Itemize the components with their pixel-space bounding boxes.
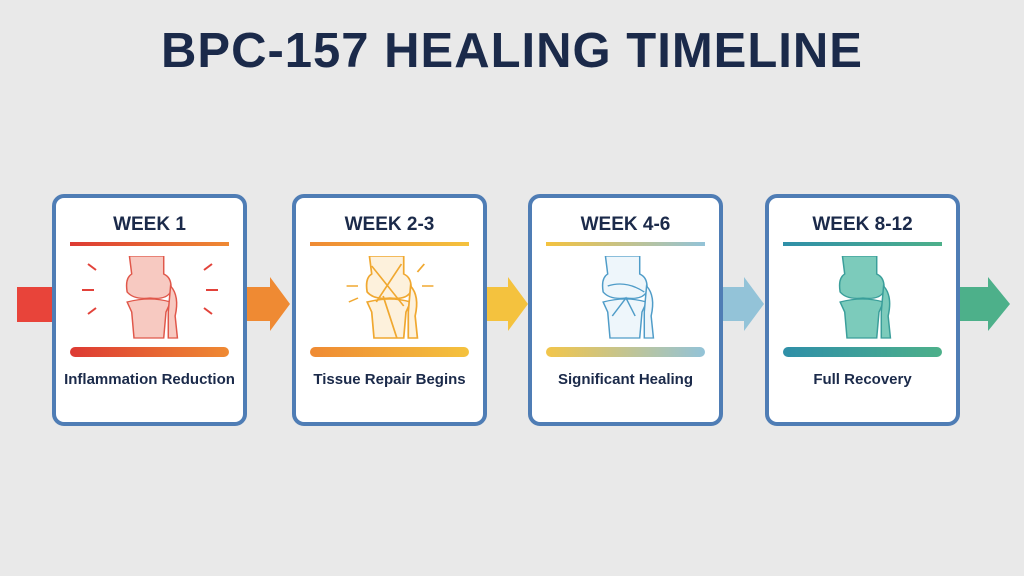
icon: inflamed knee: [126, 256, 178, 339]
title: BPC-157 HEALING TIMELINE: [161, 24, 863, 78]
arrow: 2 to 3: [487, 277, 528, 331]
heading week 4-6: WEEK 4-6: [581, 214, 670, 235]
label week 4-6: Significant Healing: [558, 371, 693, 388]
heading week 8-12: WEEK 8-12: [812, 214, 913, 235]
panel: week 2-3: [292, 194, 487, 426]
arrow: 1 to 2: [247, 277, 290, 331]
icon: repairing knee: [346, 256, 434, 339]
icon: recovered knee: [838, 256, 892, 339]
arrow: start: [17, 287, 53, 322]
panel: week 4-6: [528, 194, 723, 426]
panel: week 1: [52, 194, 247, 426]
icon: healing knee: [602, 256, 654, 339]
heading week 1: WEEK 1: [113, 214, 186, 235]
label week 2-3: Tissue Repair Begins: [313, 371, 466, 388]
label week 1: Inflammation Reduction: [64, 371, 235, 388]
heading week 2-3: WEEK 2-3: [345, 214, 434, 235]
arrow: 3 to 4: [723, 277, 764, 331]
arrow: end: [960, 277, 1010, 331]
panel: week 8-12: [765, 194, 960, 426]
label week 8-12: Full Recovery: [813, 371, 912, 388]
